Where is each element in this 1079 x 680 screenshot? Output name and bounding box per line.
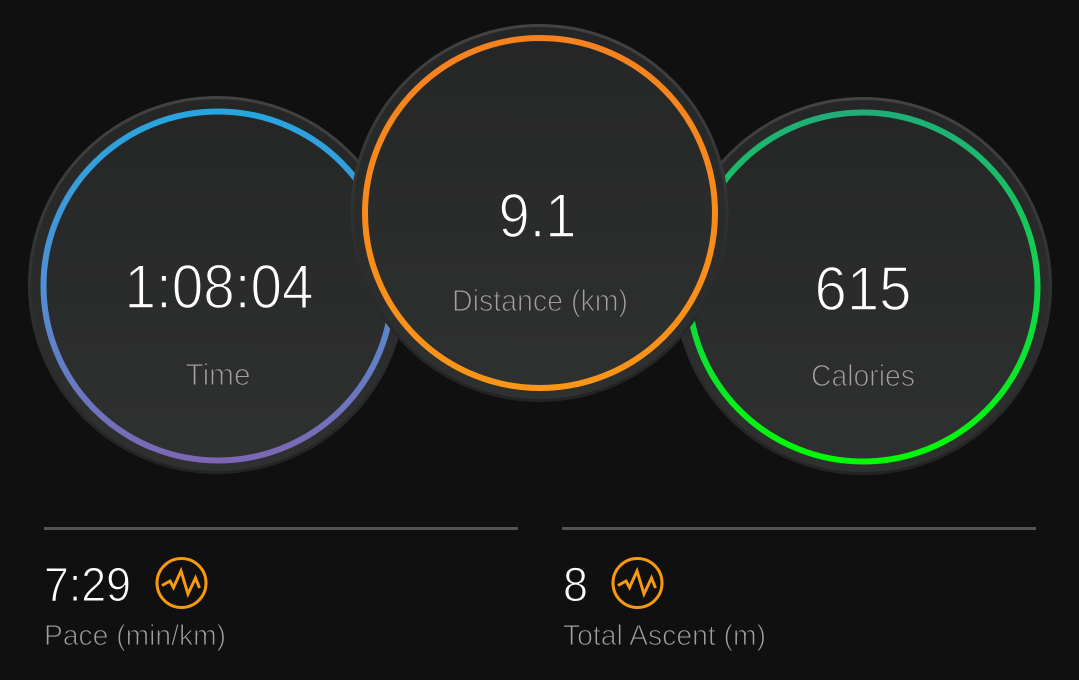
value: total ascent: 8 bbox=[563, 559, 588, 612]
panel: distance gauge bbox=[352, 26, 727, 400]
value: calories: 615 bbox=[814, 255, 912, 324]
ring: distance bbox=[365, 38, 715, 388]
panel: time gauge bbox=[30, 98, 404, 472]
panel: calories gauge bbox=[676, 98, 1050, 474]
value: time: 1:08:04 bbox=[124, 253, 314, 322]
label: total ascent: Total Ascent (m) bbox=[563, 620, 766, 652]
icon: pace activity badge bbox=[157, 558, 206, 608]
label: time: Time bbox=[186, 357, 250, 392]
label: pace: Pace (min/km) bbox=[44, 620, 226, 652]
value: distance: 9.1 bbox=[498, 182, 576, 251]
icon: ascent activity badge bbox=[613, 558, 662, 608]
ring: time bbox=[44, 112, 392, 460]
label: calories: Calories bbox=[811, 358, 915, 393]
stat: pace bbox=[44, 527, 518, 652]
ring: calories bbox=[688, 112, 1038, 462]
stat: total ascent bbox=[562, 527, 1036, 652]
label: distance: Distance (km) bbox=[452, 283, 628, 318]
value: pace: 7:29 bbox=[44, 559, 131, 612]
